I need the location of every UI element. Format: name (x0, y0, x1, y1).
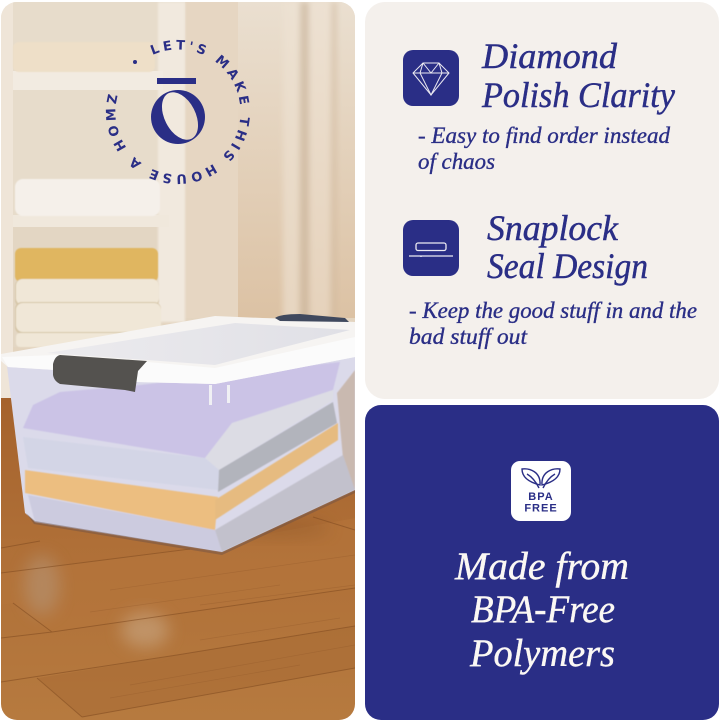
room background (1, 2, 355, 352)
lid inner panel (47, 323, 350, 365)
text: clarity description: - Easy to find order instead (418, 123, 671, 148)
wood floor (1, 398, 355, 720)
clips (209, 385, 212, 405)
heading: snaplock seal design: Seal Design (487, 246, 648, 286)
icon: bpa free badge: BPA (528, 491, 554, 503)
heading: snaplock seal design: Snaplock (487, 208, 619, 248)
heading: made from bpa-free polymers: BPA-Free (471, 588, 615, 631)
icon: bpa free badge: FREE (524, 502, 558, 514)
text: seal description: bad stuff out (409, 324, 528, 349)
box outline shading (26, 490, 355, 555)
box body (7, 350, 355, 552)
text: clarity description: of chaos (418, 149, 495, 174)
towels (14, 71, 161, 347)
logo circle (151, 90, 205, 144)
text: seal description: - Keep the good stuff in and the (409, 298, 697, 323)
panel: bpa free (365, 405, 719, 720)
heading: made from bpa-free polymers: Made from (454, 545, 629, 588)
icon: diamond (403, 50, 459, 106)
front handle (53, 355, 147, 392)
rear handle (275, 314, 349, 322)
lid (1, 316, 355, 384)
heading: made from bpa-free polymers: Polymers (469, 632, 615, 675)
panel: product photo (1, 2, 355, 720)
heading: diamond polish clarity: Diamond (481, 36, 618, 76)
circular tagline: LET'S MAKE THIS HOUSE A HOMZ (106, 40, 250, 184)
storage box (1, 314, 355, 555)
logo dot (133, 60, 137, 64)
logo badge (106, 40, 250, 184)
folded clothes (23, 362, 355, 552)
icon: snaplock (403, 220, 459, 276)
icon: bpa free badge (511, 461, 571, 521)
heading: diamond polish clarity: Polish Clarity (481, 75, 675, 115)
logo bar (157, 78, 196, 84)
shelf unit (1, 2, 185, 398)
panel: features (365, 2, 719, 399)
